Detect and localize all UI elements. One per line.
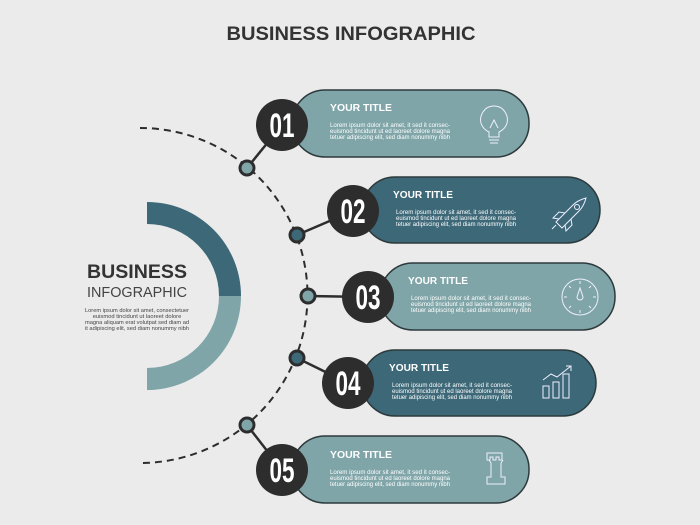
panel texts: Lorem ipsum dolor sit amet, it sed it consec- [396,210,516,216]
panel texts: Lorem ipsum dolor sit amet, it sed it consec- [330,470,450,476]
text: 01 [270,107,294,145]
left heading text [85,262,189,332]
text: 05 [270,452,294,490]
left heading text: INFOGRAPHIC [87,284,187,301]
panel texts: tetuer adipiscing elit, sed diam nonummy nibh [396,222,516,228]
left heading text: BUSINESS [87,262,187,283]
panel texts: tetuer adipiscing elit, sed diam nonummy nibh [392,395,512,401]
text: 02 [340,193,366,231]
dashed arc [140,128,308,463]
pills [292,90,615,503]
icons [481,106,598,484]
icon: rocket [552,198,586,231]
panel texts: YOUR TITLE [389,363,449,374]
icon: bulb [481,106,507,143]
panel texts [330,103,532,488]
panel texts: euismod tincidunt ut ed laoreet dolore magna [411,302,532,308]
panel texts: YOUR TITLE [393,190,453,201]
left heading text: magna aliquam erat volutpat sed diam ad [85,320,189,326]
panel texts: tetuer adipiscing elit, sed diam nonummy nibh [411,308,531,314]
panel texts: euismod tincidunt ut ed laoreet dolore magna [396,216,517,222]
number circles [256,99,394,496]
nodes [240,161,315,432]
text: 03 [356,279,380,317]
icon: chart [543,366,571,398]
panel texts: YOUR TITLE [330,103,392,114]
panel texts: Lorem ipsum dolor sit amet, it sed it consec- [411,296,531,302]
text: 04 [336,365,361,403]
icon: gauge [562,279,598,315]
left heading text: it adipiscing elit, sed diam nonummy nibh [85,326,189,332]
icon: rook [487,453,505,484]
panel texts: tetuer adipiscing elit, sed diam nonummy nibh [330,135,450,141]
title: BUSINESS INFOGRAPHIC [226,24,476,45]
connector lines [247,125,368,470]
panel texts: euismod tincidunt ut ed laoreet dolore magna [330,476,451,482]
left heading text: Lorem ipsum dolor sit amet, consectetuer [85,308,189,314]
panel texts: YOUR TITLE [330,450,392,461]
left heading text: euismod tincidunt ut laoreet dolore [93,314,181,320]
panel texts: tetuer adipiscing elit, sed diam nonummy nibh [330,482,450,488]
panel texts: euismod tincidunt ut ed laoreet dolore magna [330,129,451,135]
half ring [147,202,241,390]
panel texts: YOUR TITLE [408,276,468,287]
panel texts: Lorem ipsum dolor sit amet, it sed it consec- [330,123,450,129]
panel texts: Lorem ipsum dolor sit amet, it sed it consec- [392,383,512,389]
panel texts: euismod tincidunt ut ed laoreet dolore magna [392,389,513,395]
